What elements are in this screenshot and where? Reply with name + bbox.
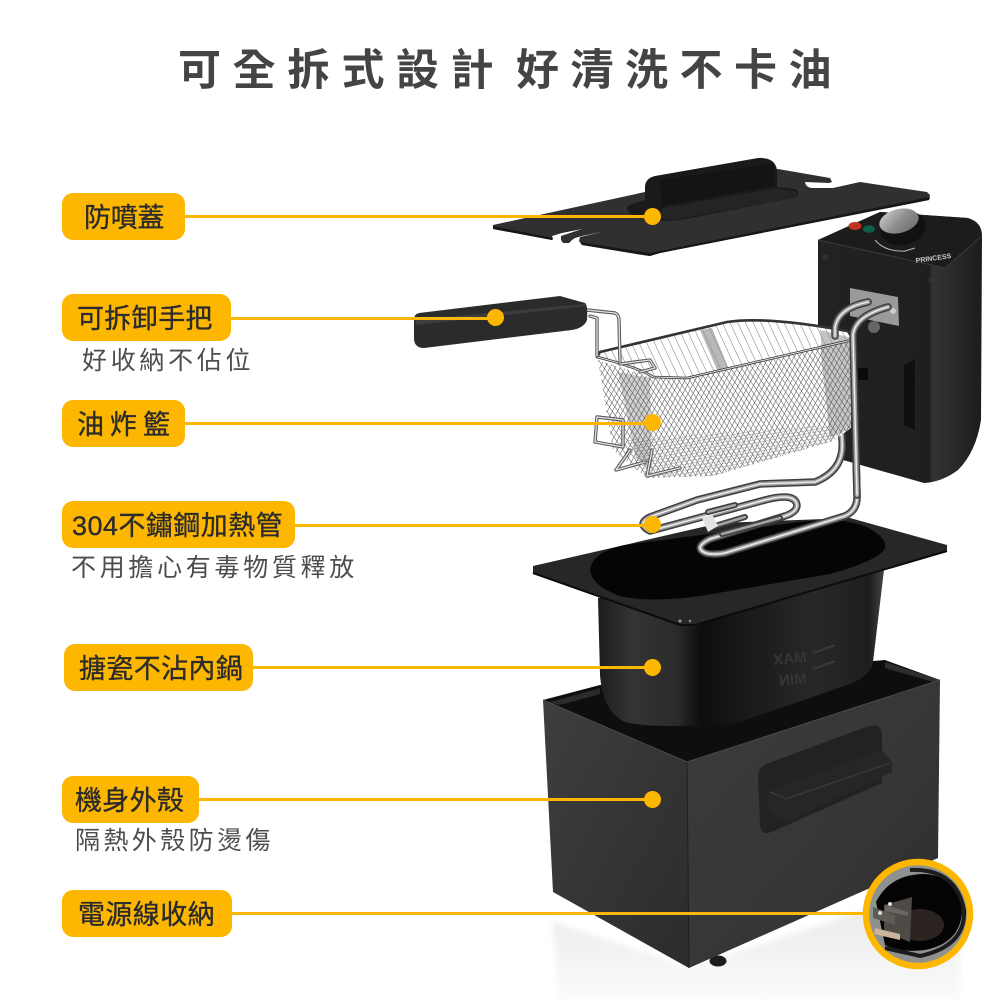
max/min marks: MIN [778,670,807,689]
label: splash guard [62,193,185,240]
text: storage note: 好收納不佔位 [82,347,254,375]
title: 可全拆式設計 [178,47,505,95]
label: frying basket: 油炸籃 [77,410,176,440]
max/min marks: MAX [773,649,807,669]
label: frying basket [62,400,185,447]
knob [875,205,929,251]
heating tube [643,302,888,554]
basket front mesh [598,340,852,478]
label: heating tube [62,501,295,548]
callout: heating tube [62,501,661,548]
label: detachable handle: 可拆卸手把 [77,304,212,334]
power cord storage detail [866,862,970,966]
callout: outer housing [62,776,661,823]
label: detachable handle [62,294,231,341]
lid grip [627,158,798,221]
label: outer housing [62,776,199,823]
callout: inner pot [64,644,661,691]
label: power cord storage: 電源線收納 [78,900,215,930]
callout: detachable handle [62,294,504,341]
basket rim [597,320,853,378]
label: power cord storage [62,890,232,937]
product illustration: exploded deep fryer [414,158,982,976]
title: 好清洗不卡油 [516,47,843,95]
basket back wall [598,320,852,378]
callout: power cord storage [62,890,863,937]
indicator lights [848,222,862,230]
callout: splash guard [62,193,661,240]
side slot [904,359,915,430]
brand mark: PRINCESS [915,253,952,265]
callout: frying basket [62,400,661,447]
frying basket [587,310,853,478]
text: safety note: 不用擔心有毒物質釋放 [71,554,358,582]
heating tube risers in front of the basket [835,302,888,495]
label: splash guard: 防噴蓋 [84,203,164,233]
text: heat insulation note: 隔熱外殼防燙傷 [75,827,274,855]
floor shadow [553,880,960,1000]
mounting plate [850,288,899,326]
label: outer housing: 機身外殼 [75,786,184,816]
max/min marks [773,645,835,689]
control unit [818,205,982,483]
label: inner pot: 搪瓷不沾內鍋 [79,654,243,684]
outer housing [543,660,940,968]
label: inner pot [64,644,253,691]
non-stick inner pot [533,518,947,726]
detachable handle [414,296,587,348]
title [178,47,843,95]
label: heating tube: 304不鏽鋼加熱管 [72,511,283,541]
basket wire handle and hooks [587,310,680,476]
housing handle [758,726,892,833]
splash guard lid [493,158,930,256]
